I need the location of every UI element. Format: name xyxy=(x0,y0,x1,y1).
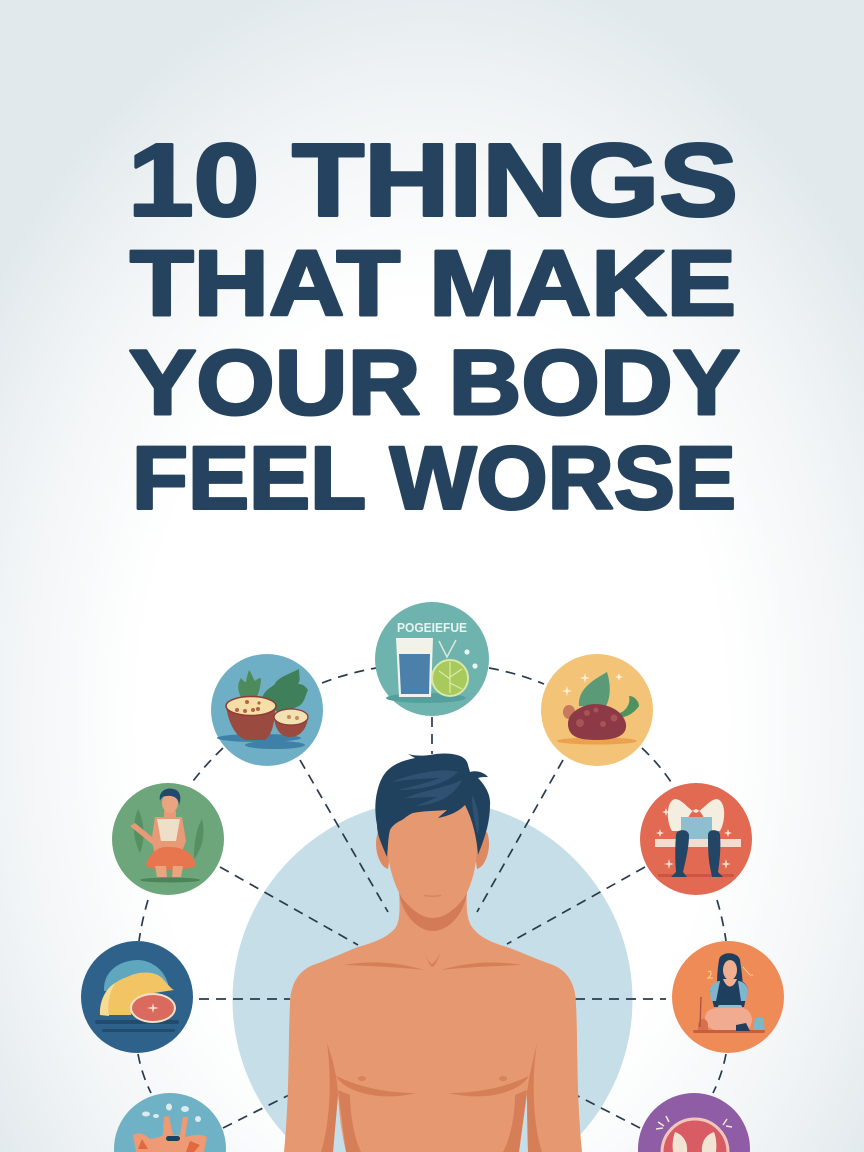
arm gap right xyxy=(519,1095,528,1152)
icon: pale blue figure xyxy=(114,1093,226,1152)
icon: seated woman xyxy=(672,941,784,1053)
torso and arms xyxy=(284,890,582,1152)
title: FEEL WORSE xyxy=(132,428,736,528)
title xyxy=(128,122,740,528)
title: THAT MAKE xyxy=(130,231,736,335)
icon: water and lime xyxy=(375,602,489,716)
title: YOUR BODY xyxy=(129,332,740,434)
neck shadow xyxy=(399,892,467,931)
dashed connector network xyxy=(138,668,726,1128)
icon: seated meditating figure xyxy=(112,783,224,895)
face xyxy=(387,800,477,918)
icon: purple stomach symbol xyxy=(638,1093,750,1152)
arm gap left xyxy=(333,1095,346,1152)
icon: person sitting on bench xyxy=(640,783,752,895)
hair highlights xyxy=(392,770,479,835)
central human figure xyxy=(284,754,582,1152)
ears xyxy=(376,832,392,869)
icon: bowls of food xyxy=(211,654,323,766)
side and chest shadows xyxy=(321,951,542,1152)
mouth xyxy=(424,894,441,897)
icon: berries and leaf xyxy=(541,654,653,766)
title: 10 THINGS xyxy=(128,122,738,238)
hair xyxy=(375,754,490,857)
background circle behind body xyxy=(232,800,632,1152)
icon label text: POGEIEFUE xyxy=(397,621,467,635)
icon: bread and grapefruit xyxy=(81,941,193,1053)
